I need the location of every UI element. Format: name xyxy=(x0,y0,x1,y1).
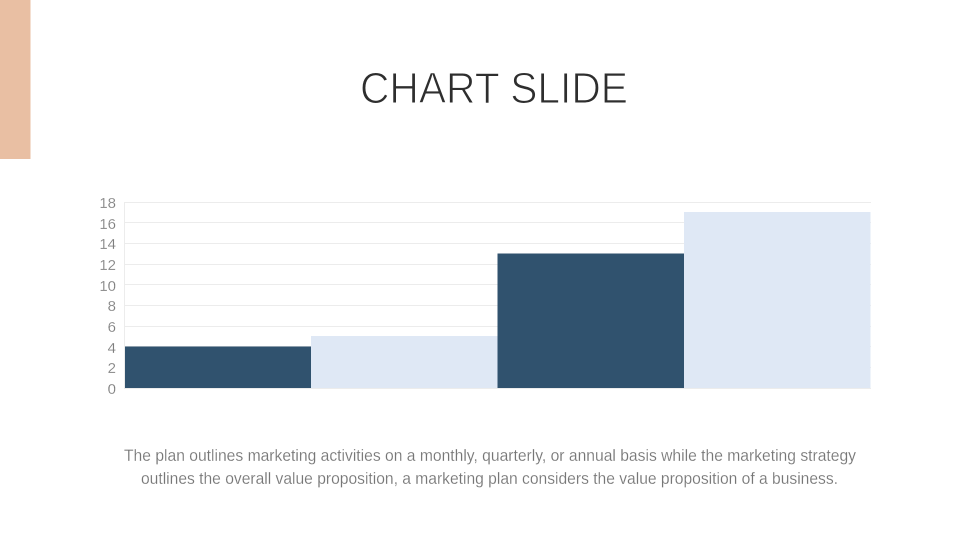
bar: series 2, value 5 xyxy=(311,336,498,388)
y-axis labels: 4 xyxy=(108,340,116,357)
bar chart xyxy=(99,195,871,398)
y-axis labels: 16 xyxy=(99,216,116,233)
y-axis labels: 8 xyxy=(108,298,116,315)
accent block xyxy=(0,0,30,159)
bar: series 1, value 4 xyxy=(125,346,311,388)
y-axis labels: 2 xyxy=(108,360,116,377)
bar: series 2, value 17 xyxy=(684,212,870,388)
y-axis labels: 10 xyxy=(99,278,116,295)
y-axis labels: 6 xyxy=(108,319,116,336)
y-axis labels: 12 xyxy=(99,257,116,274)
y-axis labels: 18 xyxy=(99,195,116,212)
description text xyxy=(124,447,857,488)
y-axis labels: 14 xyxy=(99,236,116,253)
description text: The plan outlines marketing activities on a monthly, quarterly, or annual basis while the marketing strategy xyxy=(124,447,857,465)
bar: series 1, value 13 xyxy=(498,254,684,388)
y-axis labels xyxy=(99,195,116,398)
y-axis labels: 0 xyxy=(108,381,116,398)
title: CHART SLIDE xyxy=(360,64,628,113)
description text: outlines the overall value proposition, a marketing plan considers the value proposition of a business. xyxy=(141,470,838,488)
